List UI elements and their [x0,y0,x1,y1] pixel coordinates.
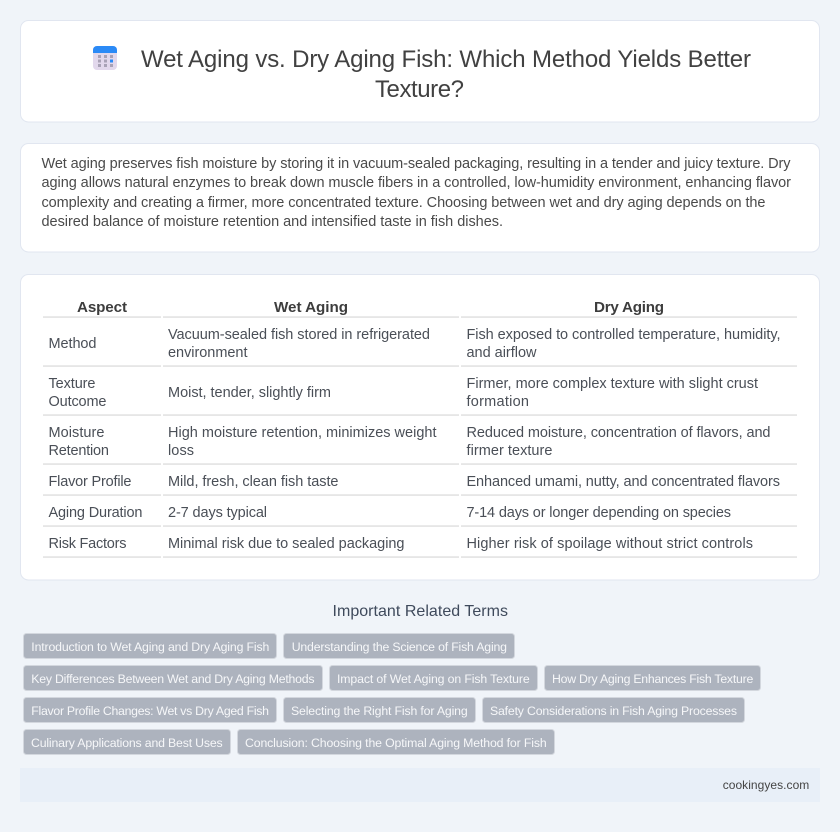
heading: important related terms: Important Related Terms [332,603,508,620]
row: texture outcome: Firmer, more complex texture with slight crust [466,376,758,392]
chip: How Dry Aging Enhances Fish Texture [552,672,753,686]
row: moisture retention: Retention [48,443,109,459]
row: texture outcome: Outcome [48,394,106,410]
row: risk factors [48,536,753,552]
row: method: environment [168,345,248,361]
description text: Wet aging preserves fish moisture by storing it in vacuum-sealed packaging, resulting in a tender and juicy texture. Dry [42,156,791,172]
related terms chips [24,634,760,754]
description text [42,156,791,230]
row: risk factors: Risk Factors [48,536,126,552]
title: Texture? [375,76,464,103]
chip [24,666,322,690]
row: texture outcome: formation [466,394,529,410]
chip [284,634,514,658]
chip [24,698,276,722]
row: texture outcome: Texture [48,376,96,392]
chip [482,698,744,722]
chip: Safety Considerations in Fish Aging Processes [490,704,737,718]
row: aging duration: Aging Duration [48,505,142,521]
row: texture outcome: Moist, tender, slightly firm [168,385,331,401]
row: moisture retention: Moisture [48,425,104,441]
row: flavor profile: Mild, fresh, clean fish taste [168,474,338,490]
description text: complexity and creating a firmer, more concentrated texture. Choosing between wet and dry aging depends on the [42,195,766,211]
chip [24,730,230,754]
chip [24,634,276,658]
chip: Understanding the Science of Fish Aging [292,640,507,654]
table header: Dry Aging [594,299,664,316]
row: moisture retention: Reduced moisture, concentration of flavors, and [466,425,770,441]
table header: Aspect [77,299,127,316]
panel: comparison table [20,274,820,580]
row: texture outcome [48,376,758,410]
row: method: Fish exposed to controlled temperature, humidity, [466,327,780,343]
chip: Conclusion: Choosing the Optimal Aging Method for Fish [245,736,547,750]
row: aging duration: 7-14 days or longer depending on species [466,505,731,521]
chip [544,666,760,690]
panel: description [20,144,820,252]
row: flavor profile: Flavor Profile [48,474,132,490]
chip [330,666,538,690]
row: flavor profile [48,474,780,490]
row: method: and airflow [466,345,537,361]
row: moisture retention: firmer texture [466,443,552,459]
chip: Impact of Wet Aging on Fish Texture [337,672,530,686]
row: moisture retention: High moisture retention, minimizes weight [168,425,436,441]
title [141,46,751,103]
row: method: Method [48,336,96,352]
description text: desired balance of moisture retention and intensified taste in fish dishes. [42,214,503,230]
row: moisture retention [48,425,770,459]
chip: Introduction to Wet Aging and Dry Aging Fish [31,640,269,654]
title: Wet Aging vs. Dry Aging Fish: Which Method Yields Better [141,46,751,73]
row: aging duration: 2-7 days typical [168,505,267,521]
row: flavor profile: Enhanced umami, nutty, and concentrated flavors [466,474,780,490]
row: aging duration [48,505,731,521]
header panel [20,20,820,122]
chip [284,698,476,722]
footer bar [20,768,820,802]
description text: aging allows natural enzymes to break down muscle fibers in a controlled, low-humidity environment, enhancing flavor [42,175,791,191]
chip: Culinary Applications and Best Uses [31,736,223,750]
chip [238,730,554,754]
footer source text: cookingyes.com [723,778,809,792]
row: risk factors: Higher risk of spoilage without strict controls [466,536,753,552]
row: method [48,327,780,361]
row: risk factors: Minimal risk due to sealed packaging [168,536,404,552]
icon: calendar [93,46,117,70]
row: method: Vacuum-sealed fish stored in refrigerated [168,327,430,343]
chip: Selecting the Right Fish for Aging [291,704,468,718]
table header [77,299,664,316]
table header: Wet Aging [274,299,348,316]
chip: Key Differences Between Wet and Dry Aging Methods [31,672,315,686]
row: moisture retention: loss [168,443,194,459]
chip: Flavor Profile Changes: Wet vs Dry Aged Fish [31,704,269,718]
